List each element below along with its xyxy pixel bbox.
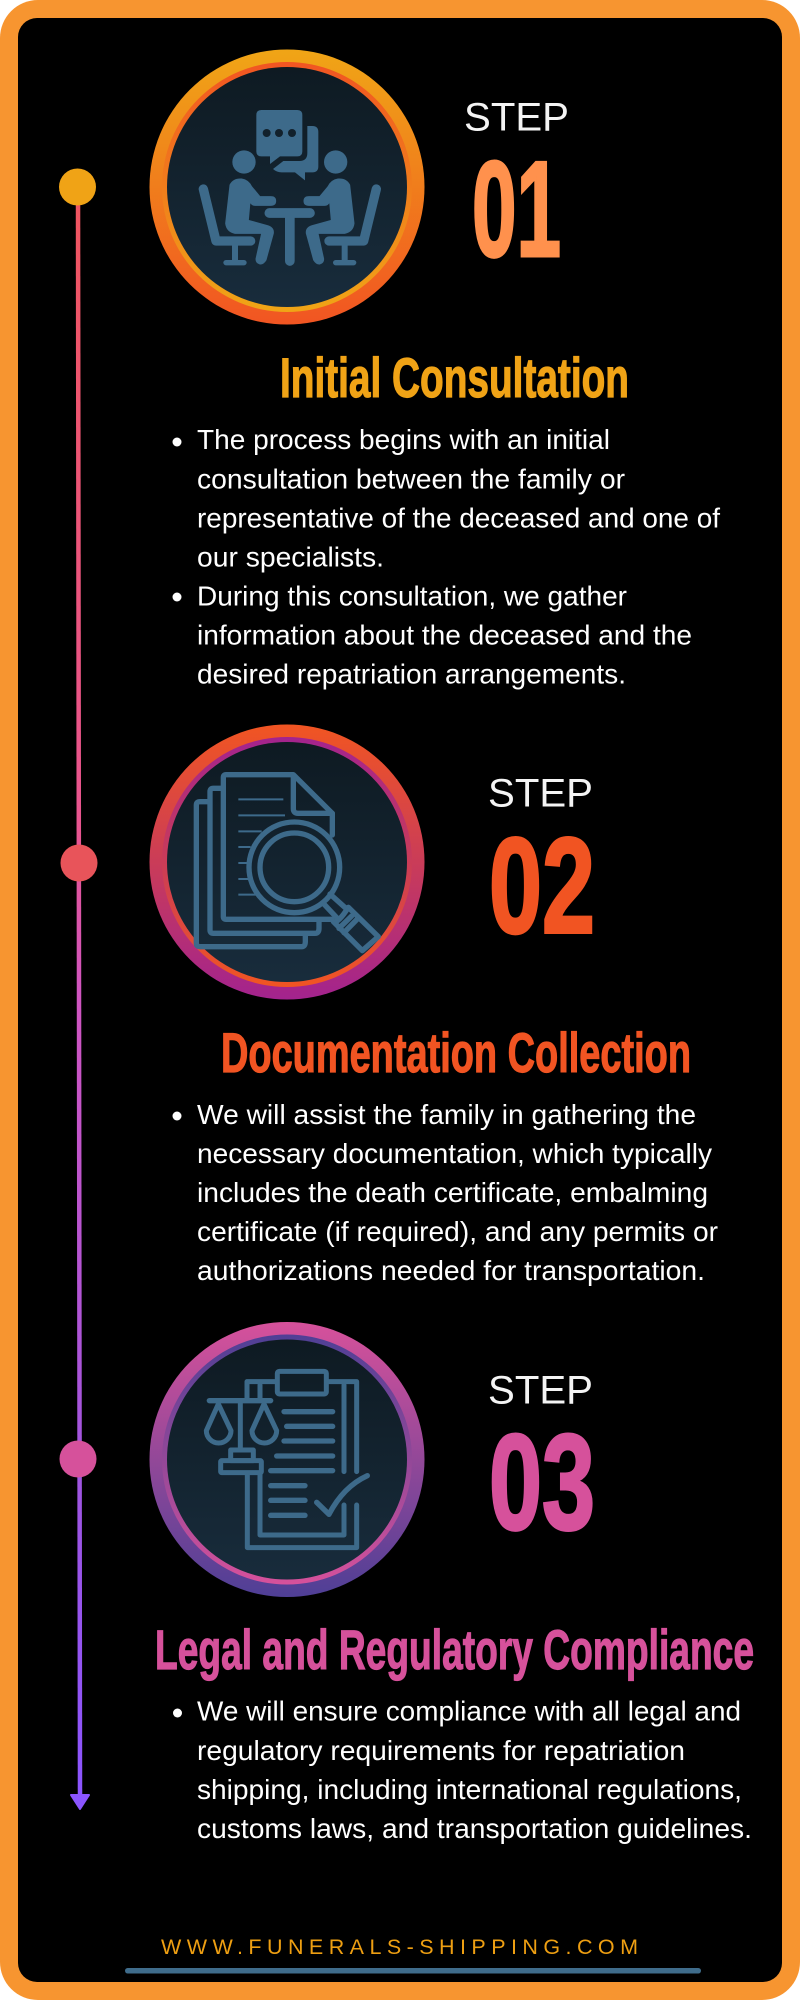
footer website: WWW.FUNERALS-SHIPPING.COM [161, 1935, 638, 1959]
step number: 02 [489, 810, 595, 962]
bullet list [173, 1696, 752, 1844]
bullet list: representative of the deceased and one of [197, 502, 720, 534]
bullet list: We will assist the family in gathering the [197, 1099, 696, 1130]
bullet list: shipping, including international regulations, [197, 1774, 742, 1805]
icon: documents and magnifier [150, 724, 424, 1000]
bullet list: customs laws, and transportation guidelines. [197, 1813, 752, 1844]
bullet list: regulatory requirements for repatriation [197, 1735, 685, 1766]
bullet list [172, 424, 720, 690]
bullet list [172, 1099, 718, 1286]
bullet list: information about the deceased and the [197, 620, 692, 650]
footer website [125, 1935, 701, 1974]
bullet list: authorizations needed for transportation. [197, 1255, 705, 1286]
panel: step 1 [150, 50, 720, 690]
bullet list: certificate (if required), and any permits or [197, 1216, 718, 1247]
panel: step 2 [150, 724, 718, 1286]
bullet list: includes the death certificate, embalming [197, 1177, 708, 1208]
step label: STEP [488, 772, 593, 816]
bullet list: consultation between the family or [197, 464, 625, 494]
step label: STEP [464, 96, 569, 140]
timeline with arrow [59, 168, 98, 1809]
bullet list: The process begins with an initial [197, 424, 610, 455]
bullet list: our specialists. [197, 542, 384, 572]
bullet list: necessary documentation, which typically [197, 1138, 712, 1169]
bullet list: We will ensure compliance with all legal and [197, 1696, 741, 1726]
heading: Initial Consultation [280, 346, 629, 409]
step number: 01 [472, 133, 561, 285]
step label: STEP [488, 1368, 593, 1412]
icon: clipboard and scales [150, 1322, 424, 1597]
bullet list: desired repatriation arrangements. [197, 658, 626, 690]
bullet list: During this consultation, we gather [197, 580, 627, 612]
panel: step 3 [150, 1322, 754, 1844]
step number: 03 [489, 1406, 595, 1558]
icon: consultation at table [150, 50, 424, 324]
